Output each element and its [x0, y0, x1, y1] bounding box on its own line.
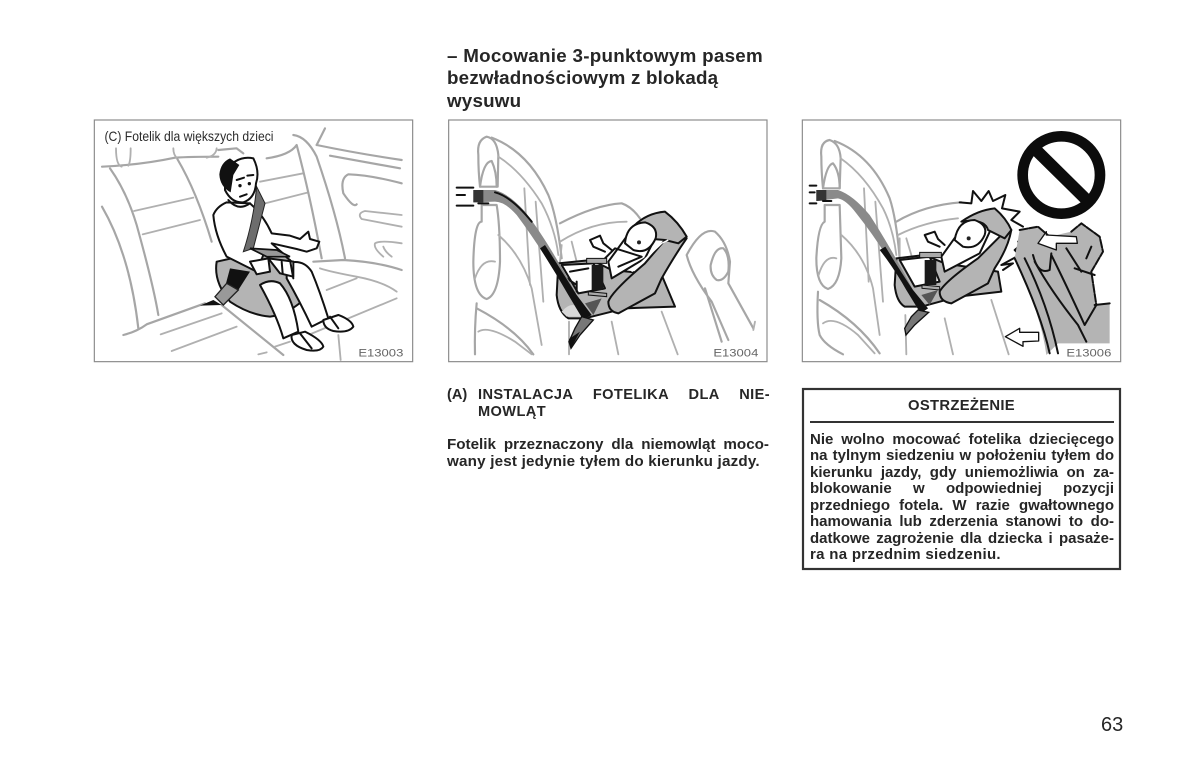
panel: booster seat illustration [94, 120, 413, 362]
warning text: blokowanie w odpowiedniej pozycji [810, 480, 1114, 497]
warning text: hamowania lub zderzenia stanowi to do- [810, 513, 1114, 530]
rear seat lines [102, 128, 402, 360]
page number: 63 [1101, 714, 1123, 736]
heading: – Mocowanie 3-punktowym pasem [447, 44, 763, 66]
warning divider [810, 421, 1114, 423]
infant seat [895, 208, 1011, 307]
figure code: E13003 [358, 348, 403, 360]
rear seat lines [816, 140, 1009, 354]
heading: bezwładnościowym z blokadą [447, 66, 718, 88]
booster cushion [216, 252, 310, 317]
infant seat [557, 212, 687, 318]
front seat being pushed [1015, 223, 1110, 355]
panel: prohibited infant seat placement illustration [802, 120, 1121, 362]
impact burst [960, 191, 1025, 270]
icon: prohibition sign [1023, 136, 1100, 214]
body paragraph: wany jest jedynie tyłem do kierunku jazdy. [447, 453, 760, 470]
legs [260, 281, 298, 338]
figure code: E13004 [713, 348, 758, 360]
warning title: OSTRZEŻENIE [908, 398, 1015, 414]
seat belt shoulder [243, 187, 265, 252]
child figure [200, 148, 353, 351]
torso [213, 202, 319, 272]
warning text: Nie wolno mocować fotelika dziecięcego [810, 430, 1114, 448]
body paragraph [447, 436, 769, 470]
heading [447, 44, 763, 111]
panel: rear-facing infant seat illustration [449, 120, 767, 362]
arrow: direction of travel [1005, 328, 1039, 346]
section heading A [447, 386, 770, 420]
head [225, 158, 257, 202]
warning text: ra na przednim siedzeniu. [810, 546, 1001, 563]
hands [250, 258, 270, 274]
figure code [1063, 344, 1116, 360]
warning text: datkowe zagrożenie dla dziecka i pasaże- [810, 530, 1114, 546]
baby [625, 222, 656, 251]
lap and knee band [268, 258, 293, 277]
body paragraph: Fotelik przeznaczony dla niemowląt moco- [447, 436, 769, 453]
section heading A: MOWLĄT [478, 404, 546, 420]
warning text [810, 430, 1114, 563]
baby [955, 220, 985, 247]
warning text: przedniego fotela. W razie gwałtownego [810, 496, 1114, 514]
section heading A: (A) [447, 386, 467, 402]
rear seat lines [473, 137, 755, 354]
warning text: na tylnym siedzeniu w położeniu tyłem do [810, 447, 1114, 464]
heading: wysuwu [447, 90, 521, 110]
section heading A: INSTALACJA FOTELIKA DLA NIE- [478, 386, 770, 402]
seat belt [457, 188, 593, 348]
panel: prohibited infant seat placement illustration: E13006 [1066, 348, 1111, 360]
warning text: kierunku jazdy, gdy uniemożliwia on za- [810, 464, 1114, 480]
panel caption: (C) Fotelik dla większych dzieci [104, 128, 274, 144]
warning box frame [803, 389, 1120, 569]
arrow: seat moves forward [1038, 232, 1077, 250]
buckle [226, 268, 250, 290]
seat belt [810, 186, 929, 335]
